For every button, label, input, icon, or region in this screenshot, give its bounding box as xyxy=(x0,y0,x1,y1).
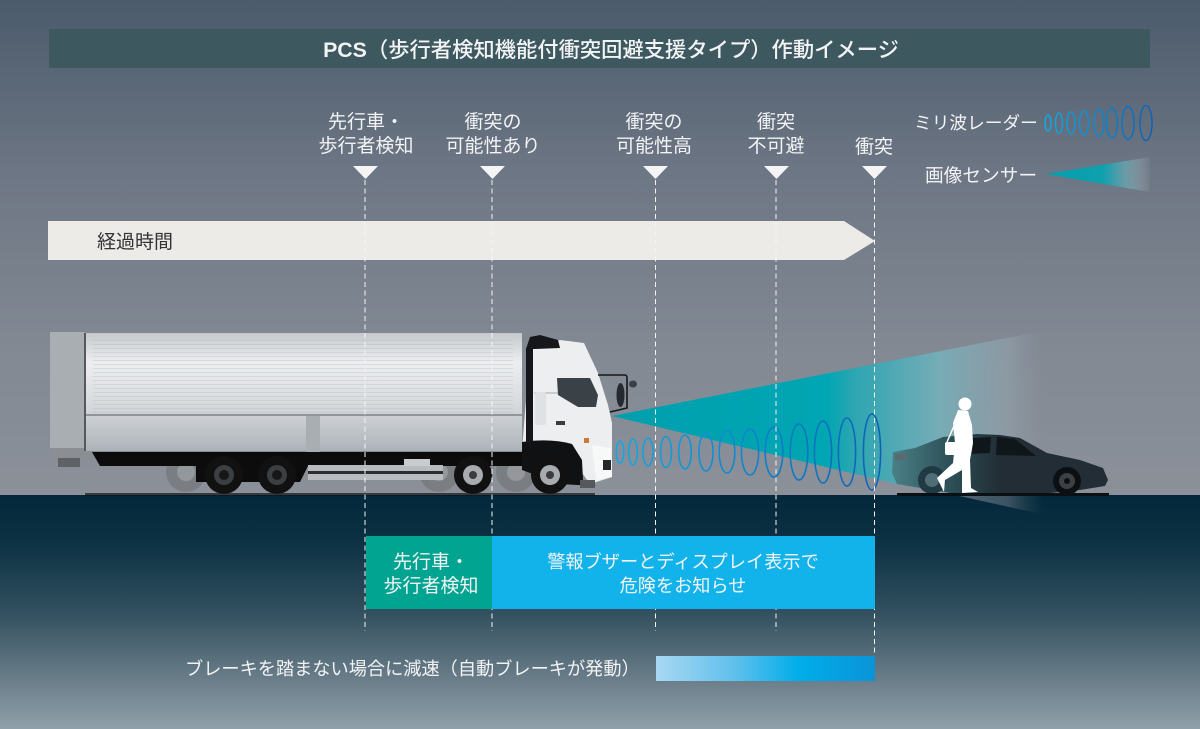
image sensor beam xyxy=(612,331,1042,495)
ghost raised wheels xyxy=(166,452,536,492)
timeline labels: 可能性高 xyxy=(616,135,692,157)
truck cab xyxy=(522,340,612,484)
wheels xyxy=(205,456,569,494)
title bar xyxy=(49,29,1150,68)
warning box xyxy=(492,536,875,609)
marker triangles xyxy=(353,166,887,179)
beam on ground xyxy=(955,495,1045,515)
warning box: 危険をお知らせ xyxy=(620,576,746,596)
pedestrian xyxy=(937,398,978,493)
legend: millimetre wave radar: ミリ波レーダー xyxy=(914,113,1038,133)
warning box: 警報ブザーとディスプレイ表示で xyxy=(547,551,819,572)
legend: millimetre wave radar xyxy=(914,106,1152,140)
timeline labels: 衝突 xyxy=(855,136,893,158)
detection box: 歩行者検知 xyxy=(383,575,479,597)
braking bar xyxy=(656,656,875,681)
title bar: PCS（歩行者検知機能付衝突回避支援タイプ）作動イメージ xyxy=(323,38,899,62)
legend: image sensor: 画像センサー xyxy=(925,165,1037,186)
timeline labels: 衝突の xyxy=(464,111,522,133)
ground shadow xyxy=(85,493,595,496)
vertical dashed timing lines xyxy=(365,180,874,681)
timeline labels xyxy=(318,111,893,158)
timeline labels: 先行車・ xyxy=(328,111,404,133)
timeline labels: 衝突 xyxy=(757,111,795,133)
detection box xyxy=(366,536,492,609)
legend: image sensor xyxy=(925,157,1150,192)
detection box: 先行車・ xyxy=(393,551,469,573)
millimetre wave radar rings xyxy=(616,414,881,490)
car xyxy=(892,434,1109,496)
timeline labels: 可能性あり xyxy=(445,135,541,157)
elapsed time arrow xyxy=(48,221,875,260)
timeline labels: 不可避 xyxy=(747,135,805,157)
timeline labels: 歩行者検知 xyxy=(318,135,414,157)
elapsed time arrow: 経過時間 xyxy=(97,231,173,253)
truck xyxy=(50,332,637,488)
timeline labels: 衝突の xyxy=(625,111,683,133)
braking label: ブレーキを踏まない場合に減速（自動ブレーキが発動） xyxy=(185,658,640,679)
